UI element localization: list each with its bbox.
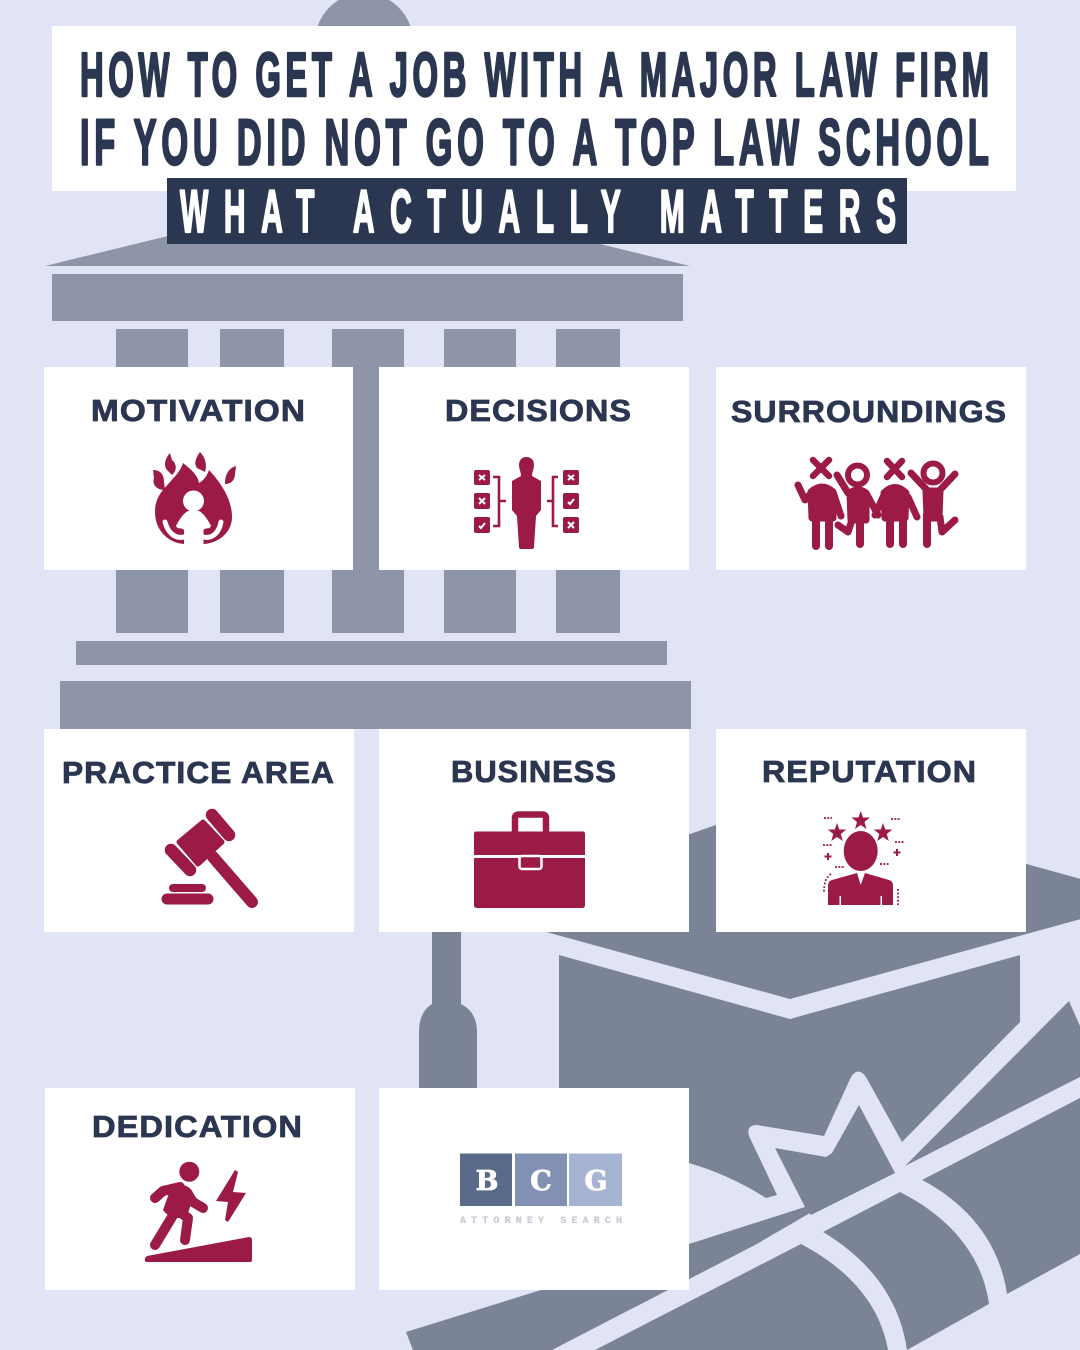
- panel: logo: [379, 1088, 689, 1290]
- logo: BCG Attorney Search: G: [584, 1166, 608, 1197]
- panel: decisions: [379, 367, 689, 570]
- subtitle banner: WHAT ACTUALLY MATTERS: [180, 179, 896, 246]
- icon: person climbing slope with lightning bolt: [145, 1162, 252, 1262]
- panel: business: [379, 729, 689, 932]
- logo: BCG Attorney Search: B: [476, 1166, 498, 1197]
- logo: BCG Attorney Search: ATTORNEY SEARCH: [460, 1216, 622, 1227]
- heading: motivation: MOTIVATION: [91, 393, 306, 428]
- icon: gavel: [167, 815, 252, 902]
- heading: business: BUSINESS: [451, 754, 617, 789]
- title block: IF YOU DID NOT GO TO A TOP LAW SCHOOL: [80, 107, 989, 179]
- panel: dedication: [45, 1088, 355, 1290]
- icon: flame with strong person: [153, 452, 236, 544]
- logo: BCG Attorney Search: [460, 1154, 622, 1227]
- heading: surroundings: SURROUNDINGS: [731, 394, 1007, 429]
- title block: HOW TO GET A JOB WITH A MAJOR LAW FIRM: [80, 40, 989, 110]
- graduation cap and diploma background illustration: [406, 799, 1080, 1350]
- icon: group of people: [798, 460, 955, 546]
- heading: decisions: DECISIONS: [445, 393, 632, 428]
- icon: person with stars: [823, 811, 905, 905]
- panel: reputation: [716, 729, 1026, 932]
- icon: briefcase: [474, 814, 585, 908]
- icon: person choosing between options: [474, 457, 579, 549]
- logo: BCG Attorney Search: C: [530, 1166, 552, 1197]
- courthouse background illustration: [45, 0, 691, 729]
- panel: motivation: [44, 367, 353, 570]
- panel: surroundings: [716, 367, 1026, 570]
- title block: [52, 26, 1016, 191]
- heading: dedication: DEDICATION: [92, 1109, 303, 1144]
- panel: practice area: [44, 729, 354, 932]
- heading: practice area: PRACTICE AREA: [62, 755, 335, 790]
- heading: reputation: REPUTATION: [762, 754, 977, 789]
